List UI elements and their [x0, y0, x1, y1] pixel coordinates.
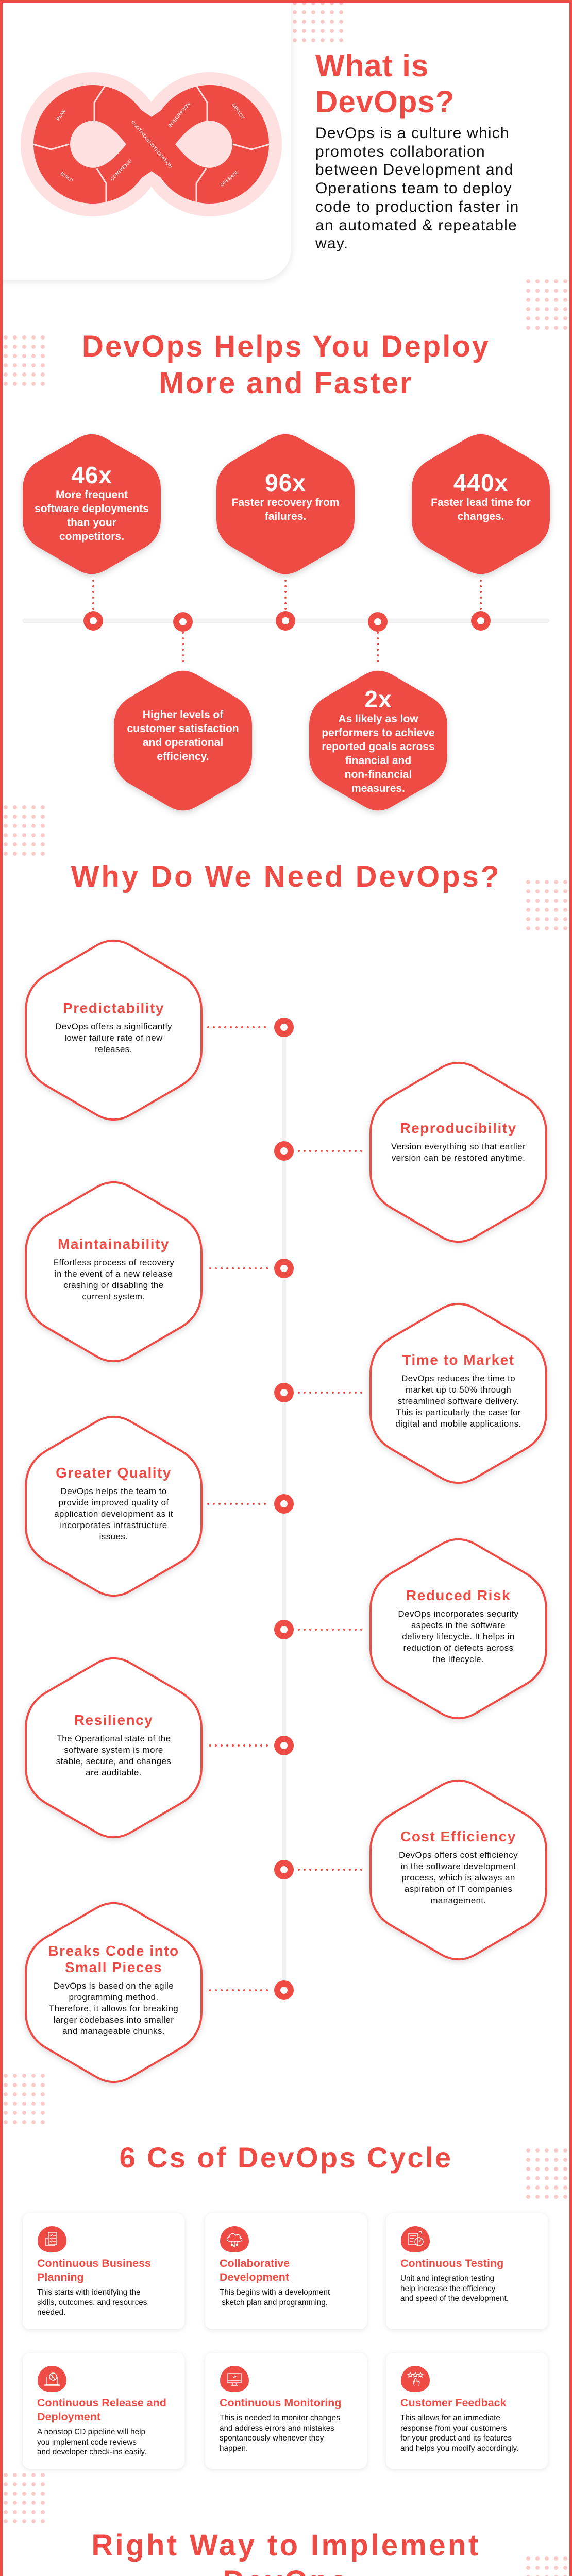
text block: definition: promotes collaboration: [315, 143, 485, 160]
panel: greater quality: application development as it: [54, 1509, 173, 1519]
stat: 2x: financial and: [345, 754, 411, 767]
card: continuous business planning: Planning: [37, 2271, 84, 2283]
stat: 440x: 440x: [453, 469, 508, 496]
panel: cost efficiency: aspiration of IT companies: [405, 1884, 512, 1894]
card: continuous business planning: needed.: [37, 2308, 65, 2317]
panel: reduced risk: delivery lifecycle. It helps in: [402, 1632, 515, 1641]
stat: customer satisfaction: Higher levels of: [143, 709, 223, 720]
card: continuous release and deployment: [23, 2353, 184, 2469]
panel: cost efficiency: Cost Efficiency: [400, 1828, 516, 1844]
card: customer feedback: for your product and its features: [400, 2434, 512, 2443]
stat: 440x: changes.: [457, 510, 504, 522]
card: continuous business planning: [23, 2213, 184, 2329]
stat: 2x: 2x: [364, 685, 392, 712]
panel: maintainability: crashing or disabling the: [63, 1280, 164, 1290]
panel: time to market: digital and mobile applications.: [395, 1419, 521, 1429]
card: continuous release and deployment: Deployment: [37, 2411, 100, 2423]
stat: 96x: [213, 434, 358, 579]
panel: maintainability: Maintainability: [58, 1236, 170, 1252]
icon: devops infinity loop: DEPLOY: [231, 102, 246, 121]
panel: reduced risk: DevOps incorporates security: [398, 1609, 519, 1619]
panel: time to market: Time to Market: [402, 1352, 515, 1368]
stat: 46x: software deployments: [35, 503, 149, 514]
panel: breaks code into small pieces: [22, 1901, 205, 2087]
panel: breaks code into small pieces: programming method.: [69, 1992, 158, 2002]
card: collaborative development: Collaborative: [220, 2257, 290, 2269]
stat: customer satisfaction: efficiency.: [157, 750, 209, 762]
card: continuous monitoring: This is needed to monitor changes: [220, 2414, 340, 2422]
panel: maintainability: in the event of a new release: [55, 1269, 173, 1279]
panel: resiliency: Resiliency: [74, 1712, 153, 1728]
card: collaborative development: [205, 2213, 367, 2329]
card: collaborative development: This begins with a development: [220, 2288, 330, 2297]
panel: reduced risk: reduction of defects across: [403, 1643, 513, 1653]
card: continuous release and deployment: A nonstop CD pipeline will help: [37, 2428, 145, 2436]
stat: 46x: than your: [67, 516, 116, 529]
card: continuous release and deployment: you implement code reviews: [37, 2438, 137, 2446]
panel: resiliency: The Operational state of the: [57, 1734, 171, 1743]
panel: cost efficiency: [367, 1778, 550, 1964]
panel: maintainability: Effortless process of recovery: [53, 1258, 174, 1267]
panel: reduced risk: [367, 1537, 550, 1723]
icon: devops infinity loop: PLAN: [56, 109, 66, 122]
stat: 2x: performers to achieve: [322, 726, 435, 739]
card: continuous business planning: This starts with identifying the: [37, 2288, 141, 2297]
timeline: stats connectors: [23, 580, 549, 662]
card: collaborative development: sketch plan and programming.: [222, 2298, 328, 2307]
card: customer feedback: [386, 2353, 548, 2469]
card: continuous testing: [386, 2213, 548, 2329]
stat: 96x: Faster recovery from: [232, 497, 339, 508]
panel: cost efficiency: management.: [430, 1895, 486, 1905]
stat: 46x: 46x: [71, 462, 112, 488]
heading: deploy more and faster: More and Faster: [159, 366, 413, 400]
panel: breaks code into small pieces: and manageable chunks.: [62, 2026, 165, 2036]
title: What is DevOps: DevOps?: [315, 84, 455, 119]
card: continuous business planning: skills, outcomes, and resources: [37, 2298, 147, 2307]
panel: breaks code into small pieces: Therefore, it allows for breaking: [49, 2004, 178, 2013]
title: What is DevOps: [315, 48, 455, 119]
panel: time to market: DevOps reduces the time to: [401, 1374, 515, 1383]
card: customer feedback: This allows for an immediate: [400, 2414, 500, 2422]
timeline: why devops: [207, 1018, 362, 2000]
icon: devops infinity loop: [21, 72, 282, 216]
panel: time to market: streamlined software delivery.: [398, 1396, 519, 1406]
card: continuous business planning: Continuous Business: [37, 2257, 151, 2269]
panel: reduced risk: the lifecycle.: [433, 1654, 484, 1664]
card: customer feedback: and helps you modify accordingly.: [400, 2444, 518, 2452]
panel: resiliency: are auditable.: [86, 1768, 142, 1777]
panel: greater quality: [22, 1415, 205, 1600]
icon: devops infinity loop: CONTINOUS INTEGRATION: [130, 120, 173, 169]
text block: definition: DevOps is a culture which: [315, 125, 510, 142]
stat: 46x: [20, 434, 164, 579]
icon: devops infinity loop: CONTINOUS: [109, 158, 133, 182]
panel: greater quality: Greater Quality: [56, 1465, 172, 1481]
stat: 2x: reported goals across: [322, 741, 435, 752]
text block: definition: Operations team to deploy: [315, 180, 512, 197]
panel: predictability: Predictability: [63, 1000, 164, 1016]
panel: breaks code into small pieces: larger codebases into smaller: [54, 2015, 174, 2025]
panel: cost efficiency: in the software development: [401, 1861, 516, 1871]
card: continuous monitoring: happen.: [220, 2444, 248, 2452]
panel: cost efficiency: DevOps offers cost efficiency: [399, 1850, 518, 1860]
text block: definition: code to production faster in: [315, 198, 519, 215]
card: continuous testing: help increase the efficiency: [400, 2284, 495, 2293]
heading: deploy more and faster: [82, 330, 490, 400]
panel: reproducibility: version can be restored anytime.: [392, 1153, 525, 1163]
stat: 46x: More frequent: [56, 488, 128, 501]
stat: customer satisfaction: customer satisfaction: [127, 722, 239, 735]
panel: greater quality: DevOps helps the team to: [60, 1486, 167, 1496]
card: customer feedback: Customer Feedback: [400, 2397, 507, 2409]
heading: why do we need devops: Why Do We Need DevOps?: [71, 860, 501, 893]
stat: 2x: measures.: [351, 782, 405, 794]
panel: resiliency: [22, 1656, 205, 1842]
icon: devops infinity loop: BUILD: [60, 171, 74, 183]
stat: 440x: [409, 434, 552, 579]
panel: predictability: releases.: [95, 1044, 132, 1054]
card: continuous monitoring: Continuous Monitoring: [220, 2397, 341, 2409]
panel: maintainability: current system.: [82, 1292, 145, 1301]
panel: cost efficiency: process, which is always an: [401, 1873, 515, 1883]
text block: definition: [315, 125, 519, 252]
stat: customer satisfaction: [111, 670, 255, 815]
panel: resiliency: software system is more: [64, 1745, 163, 1755]
stat: 96x: failures.: [265, 510, 306, 522]
panel: resiliency: stable, secure, and changes: [56, 1756, 171, 1766]
card: continuous monitoring: spontaneously whenever they: [220, 2434, 324, 2443]
card: customer feedback: response from your customers: [400, 2424, 507, 2433]
card: continuous testing: Continuous Testing: [400, 2257, 503, 2269]
stat: 46x: competitors.: [59, 531, 124, 542]
panel: reduced risk: aspects in the software: [411, 1620, 506, 1630]
stat: 96x: 96x: [265, 469, 306, 496]
heading: 6 Cs of DevOps cycle: 6 Cs of DevOps Cycle: [120, 2141, 452, 2174]
text block: definition: between Development and: [315, 161, 514, 178]
panel: greater quality: issues.: [99, 1532, 128, 1541]
stat: 440x: Faster lead time for: [431, 497, 531, 508]
card: continuous monitoring: [205, 2353, 367, 2469]
panel: reproducibility: Reproducibility: [400, 1120, 517, 1136]
panel: maintainability: [22, 1180, 205, 1366]
panel: reproducibility: [367, 1061, 550, 1247]
panel: predictability: [22, 939, 205, 1124]
card: continuous testing: and speed of the development.: [400, 2294, 509, 2303]
panel: time to market: This is particularly the case for: [396, 1408, 521, 1417]
panel: predictability: lower failure rate of new: [64, 1033, 163, 1043]
title: What is DevOps: What is: [315, 48, 429, 83]
card: continuous release and deployment: and developer check-ins easily.: [37, 2448, 146, 2456]
text block: definition: an automated & repeatable: [315, 217, 517, 234]
card: continuous monitoring: and address errors and mistakes: [220, 2424, 334, 2433]
icon: devops infinity loop: OPERATE: [220, 170, 240, 188]
icon: devops infinity loop: INTEGRATION: [167, 101, 191, 129]
panel: reproducibility: Version everything so that earlier: [391, 1142, 526, 1151]
panel: time to market: [367, 1302, 550, 1488]
stat: 2x: As likely as low: [338, 713, 418, 724]
panel: reduced risk: Reduced Risk: [406, 1587, 511, 1603]
card: continuous release and deployment: Continuous Release and: [37, 2397, 166, 2409]
panel: breaks code into small pieces: Breaks Code into: [48, 1943, 179, 1959]
stat: customer satisfaction: and operational: [143, 737, 223, 748]
card: collaborative development: Development: [220, 2271, 289, 2283]
heading: right way to implement devops: Right Way to Implement: [91, 2529, 481, 2562]
text block: definition: way.: [315, 235, 348, 252]
panel: breaks code into small pieces: Small Pieces: [65, 1959, 162, 1975]
panel: greater quality: provide improved quality of: [59, 1498, 169, 1507]
stat: 2x: non-financial: [345, 769, 412, 780]
panel: intro card: [0, 0, 291, 280]
panel: breaks code into small pieces: DevOps is based on the agile: [54, 1981, 174, 1991]
heading: deploy more and faster: DevOps Helps You Deploy: [82, 330, 490, 363]
panel: time to market: market up to 50% through: [406, 1385, 511, 1395]
card: continuous testing: Unit and integration testing: [400, 2274, 494, 2283]
panel: predictability: DevOps offers a significantly: [55, 1022, 172, 1031]
stat: 2x: [306, 670, 450, 815]
panel: greater quality: incorporates infrastructure: [60, 1520, 167, 1530]
